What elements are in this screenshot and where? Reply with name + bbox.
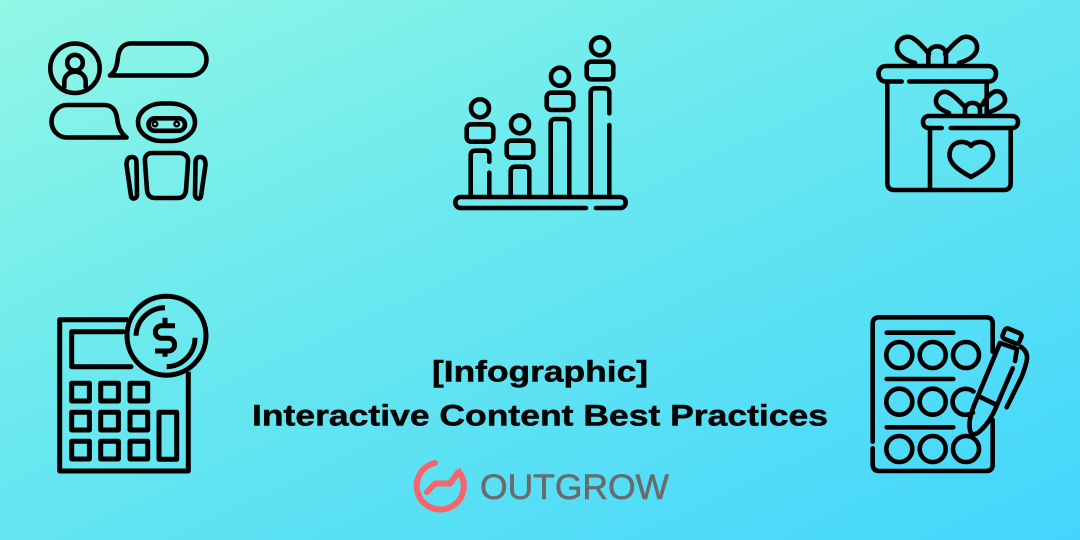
title [252, 356, 828, 433]
answer circles [886, 342, 979, 462]
dollar coin [127, 296, 206, 375]
person bar 2 [507, 115, 533, 197]
icon: gift boxes [878, 37, 1018, 190]
person bar 1 [467, 99, 493, 197]
icon: people on rising bar chart [455, 37, 626, 208]
logo mark [417, 463, 464, 509]
calculator screen [72, 332, 131, 367]
speech bubble: top [110, 44, 206, 76]
icon: calculator with dollar coin [60, 296, 206, 471]
Outgrow logo [417, 463, 669, 509]
logo wordmark: OUTGROW [480, 468, 669, 507]
calculator keys [72, 383, 177, 459]
user avatar [50, 44, 100, 93]
calculator body [60, 320, 188, 471]
survey page [873, 317, 993, 471]
baseline [455, 197, 626, 208]
icon: chatbot conversation [50, 44, 206, 199]
title line 1: [Infographic] [432, 356, 648, 389]
speech bubble: bottom [52, 105, 126, 138]
person bar 4 [587, 37, 613, 197]
small gift [923, 91, 1018, 190]
person bar 3 [547, 68, 573, 197]
pen [969, 328, 1027, 434]
title line 2: Interactive Content Best Practices [252, 400, 828, 433]
heart [950, 142, 993, 177]
large gift [878, 37, 1011, 190]
robot body and arms [126, 153, 206, 199]
icon: survey sheet with pen [873, 317, 1027, 471]
answer lines [887, 333, 953, 427]
robot head [138, 104, 195, 141]
